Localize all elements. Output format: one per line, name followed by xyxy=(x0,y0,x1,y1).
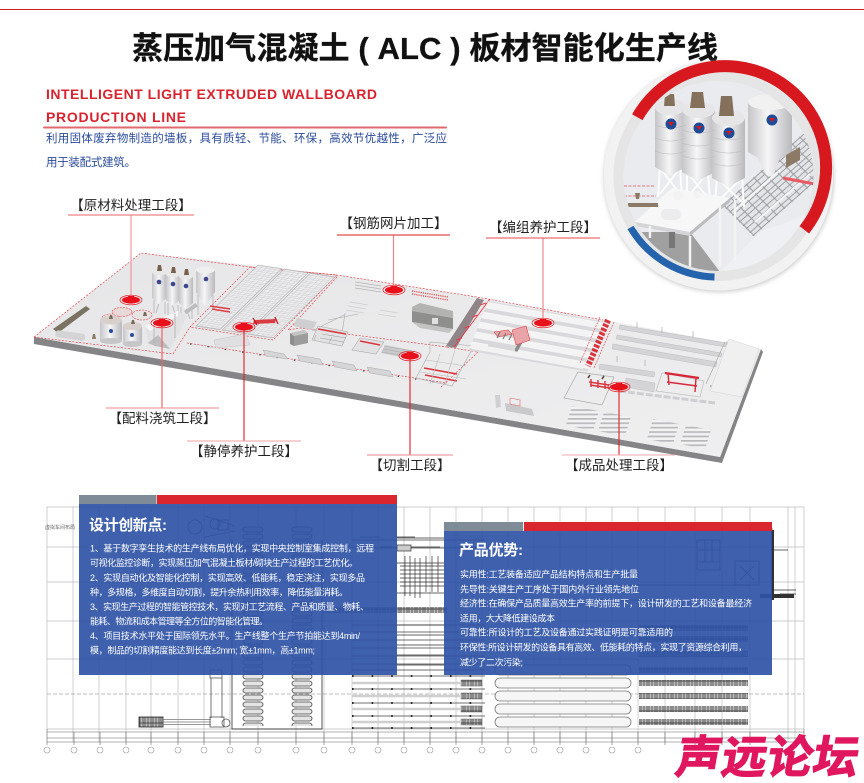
panel list: 经济性:在确保产品质量高效生产率的前提下，设计研发的工艺和设备最经济 xyxy=(460,598,752,608)
cutting line equipment xyxy=(293,318,474,386)
inset conveyor rails xyxy=(735,170,810,222)
intro block xyxy=(43,86,447,169)
inset red arc xyxy=(637,66,826,230)
panel list: 可视化监控诊断，实现蒸压加气混凝土板材/砌块生产过程的工艺优化。 xyxy=(90,557,358,568)
rail nodes xyxy=(352,676,485,728)
panel list: 适用，大大降低建设成本 xyxy=(460,612,555,624)
watermark logo: 声远论坛 xyxy=(672,732,863,783)
inset dashed marks xyxy=(624,186,656,196)
intro text: 用于装配式建筑。 xyxy=(46,155,136,169)
boiler unit xyxy=(495,395,534,416)
panel list xyxy=(90,542,374,656)
panel list: 种，多规格，多维度自动切割，提升余热利用效率，降低能量消耗。 xyxy=(90,586,348,598)
zone outlines xyxy=(34,253,603,388)
inset floor xyxy=(642,232,720,271)
panel list: 1、基于数字孪生技术的生产线布局优化，实现中央控制室集成控制，远程 xyxy=(90,542,374,554)
panel list: 能耗、物流和成本管理等全方位的智能化管理。 xyxy=(90,616,268,626)
finished stacks xyxy=(566,406,711,449)
drawing title: 虚拟车间布局 xyxy=(45,524,75,531)
blueprint grid xyxy=(47,507,804,742)
callout: curing: 【编组养护工段】 xyxy=(489,220,597,235)
callout: static curing xyxy=(187,330,301,459)
callout: cutting: 【切割工段】 xyxy=(370,457,450,473)
blueprint light rails xyxy=(352,683,460,722)
inset silos xyxy=(655,92,792,187)
curing diagonal rack right xyxy=(588,320,608,366)
axis markers xyxy=(44,747,641,753)
end apron xyxy=(710,339,759,397)
curing diagonal rack left xyxy=(446,298,484,348)
platform side xyxy=(34,337,763,463)
road dashes xyxy=(190,344,447,384)
raw material conveyor xyxy=(53,306,96,341)
panel bars xyxy=(79,495,156,504)
panel list: 2、实现自动化及智能化控制，实现高效、低能耗，稳定浇注，实现多品 xyxy=(90,572,365,583)
inset blue arc xyxy=(630,228,714,277)
callout: batching: 【配料浇筑工段】 xyxy=(108,411,216,426)
panel list xyxy=(460,568,752,668)
callout: cutting xyxy=(367,358,453,473)
blueprint dense machinery xyxy=(360,528,796,665)
panel list: 可靠性:所设计的工艺及设备通过实践证明是可靠适用的 xyxy=(460,626,673,638)
platform top xyxy=(34,253,761,457)
static curing cranes xyxy=(210,306,278,325)
static curing grid xyxy=(196,265,335,338)
blueprint end units xyxy=(461,680,482,725)
title: 蒸压加气混凝土 ( ALC ) 板材智能化生产线 xyxy=(132,31,718,66)
panel: design innovations xyxy=(79,495,397,675)
small grey box xyxy=(290,330,308,346)
storage rows xyxy=(599,325,727,392)
blueprint machines xyxy=(188,516,235,727)
dimension lines xyxy=(47,729,804,745)
inset tower legs xyxy=(658,167,744,207)
silos xyxy=(152,265,215,319)
callout: curing xyxy=(486,220,600,318)
end conveyor xyxy=(619,342,738,403)
blueprint long rails xyxy=(352,540,485,728)
inset ring xyxy=(604,62,834,292)
heading rule xyxy=(43,126,447,128)
panel background xyxy=(444,531,772,675)
callout: batching xyxy=(106,326,219,426)
panel bars xyxy=(444,522,523,531)
curing base strip xyxy=(470,343,585,369)
callout: finishing xyxy=(562,390,675,473)
english heading: INTELLIGENT LIGHT EXTRUDED WALLBOARD xyxy=(46,86,377,102)
blueprint background xyxy=(45,507,804,742)
callout: raw material xyxy=(68,198,194,295)
panel background xyxy=(79,504,397,675)
static curing base wall xyxy=(214,334,250,348)
batching tower xyxy=(145,303,198,349)
storage posts xyxy=(617,322,727,366)
blueprint chain rows xyxy=(324,607,748,725)
blueprint rack columns xyxy=(232,526,322,729)
inset scene xyxy=(624,81,814,271)
panel list: 减少了二次污染; xyxy=(460,656,523,668)
panel heading: 产品优势: xyxy=(459,542,523,559)
packing frames xyxy=(564,372,614,405)
english heading xyxy=(46,86,377,125)
markers xyxy=(120,285,630,392)
production line 3D scene xyxy=(34,253,763,463)
callout: rebar mesh: 【钢筋网片加工】 xyxy=(340,215,448,231)
blueprint centre axis xyxy=(47,693,804,695)
curing kiln rows xyxy=(469,301,607,372)
english heading: PRODUCTION LINE xyxy=(46,109,186,125)
inset platform xyxy=(635,188,730,232)
intro text: 利用固体废弃物制造的墙板，具有质轻、节能、环保，高效节优越性，广泛应 xyxy=(46,131,447,145)
callout lines and markers xyxy=(68,198,675,473)
blueprint axis strip xyxy=(44,729,804,753)
red gantry crane xyxy=(656,373,704,397)
ferry carts row xyxy=(263,350,393,377)
round detail inset xyxy=(604,62,838,292)
raw material tanks xyxy=(100,308,152,347)
panel: product advantages xyxy=(444,522,772,675)
panel heading: 设计创新点: xyxy=(89,516,167,534)
panel list: 先导性:关键生产工序处于国内外行业领先地位 xyxy=(460,584,639,594)
top rule xyxy=(0,9,864,10)
right edge detail xyxy=(760,530,794,600)
callout: finishing: 【成品处理工段】 xyxy=(565,458,673,473)
panel list: 3、实现生产过程的智能管控技术，实现对工艺流程、产品和质量、物耗、 xyxy=(90,601,369,612)
callout: static curing: 【静停养护工段】 xyxy=(190,443,298,459)
reinforcement mesh section xyxy=(312,282,448,341)
panel list: 4、项目技术水平处于国际领先水平。生产线整个生产节拍能达到4min/ xyxy=(90,630,360,641)
panel list: 模，制品的切割精度能达到长度±2mm; 宽±1mm，高±1mm; xyxy=(90,644,315,656)
callout: raw material: 【原材料处理工段】 xyxy=(70,198,192,213)
blueprint motor block xyxy=(139,717,211,727)
callout: rebar mesh xyxy=(337,215,450,285)
intro text xyxy=(46,131,447,169)
grey building xyxy=(412,303,453,333)
panel list: 实用性:工艺装备适应产品结构特点和生产批量 xyxy=(460,568,638,580)
blueprint tubes xyxy=(495,665,631,727)
curing transfer car xyxy=(488,326,530,356)
panel list: 环保性:所设计研发的设备具有高效、低能耗的特点，实现了资源综合利用， xyxy=(460,642,747,652)
inset conveyor grid xyxy=(724,134,814,236)
